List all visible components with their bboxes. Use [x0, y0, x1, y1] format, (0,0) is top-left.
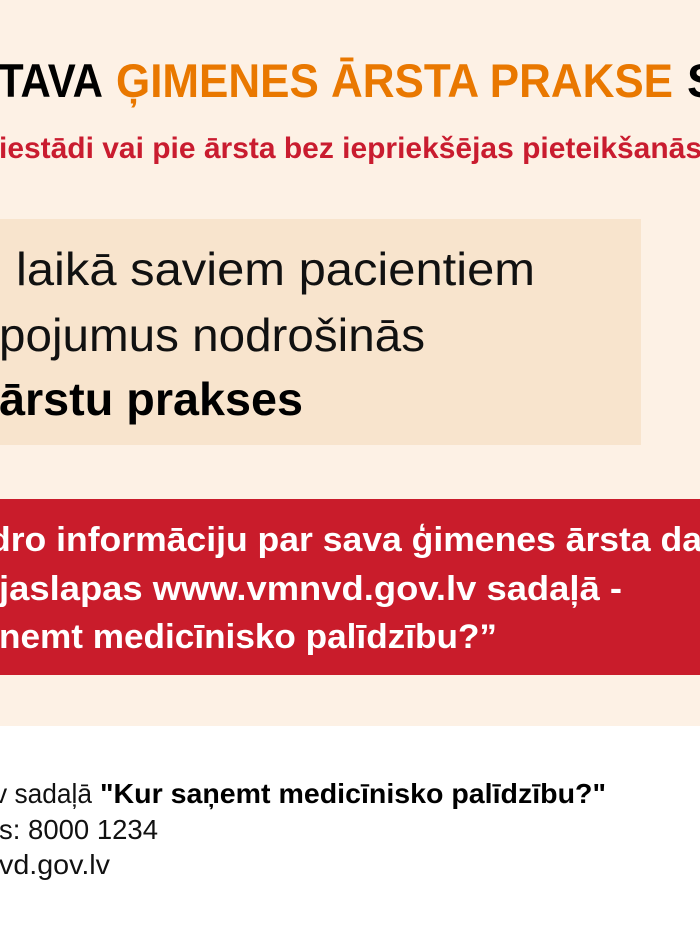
- footer contact text: s: 8000 1234: [0, 814, 158, 845]
- subtitle: iestādi vai pie ārsta bez iepriekšējas pieteikšanās: [0, 132, 700, 165]
- footer contact text: [0, 778, 606, 880]
- title: TAVA: [0, 54, 103, 107]
- title: ĢIMENES ĀRSTA PRAKSE: [116, 54, 673, 107]
- footer contact text: vd.gov.lv: [0, 849, 110, 880]
- statement line 2: pojumus nodrošinās: [0, 309, 425, 361]
- statement line 1: laikā saviem pacientiem: [16, 243, 535, 295]
- statement line 3: ārstu prakses: [0, 373, 303, 425]
- footer contact text: "Kur saņemt medicīnisko palīdzību?": [100, 778, 606, 809]
- callout text: dro informāciju par sava ģimenes ārsta da: [0, 521, 700, 559]
- callout text: jaslapas www.vmnvd.gov.lv sadaļā -: [0, 570, 622, 608]
- panel: highlighted statement: [0, 219, 641, 445]
- callout text: nemt medicīnisko palīdzību?”: [0, 618, 497, 656]
- panel: red callout: [0, 499, 700, 675]
- panel: cream background: [0, 0, 700, 726]
- callout text: [0, 521, 700, 656]
